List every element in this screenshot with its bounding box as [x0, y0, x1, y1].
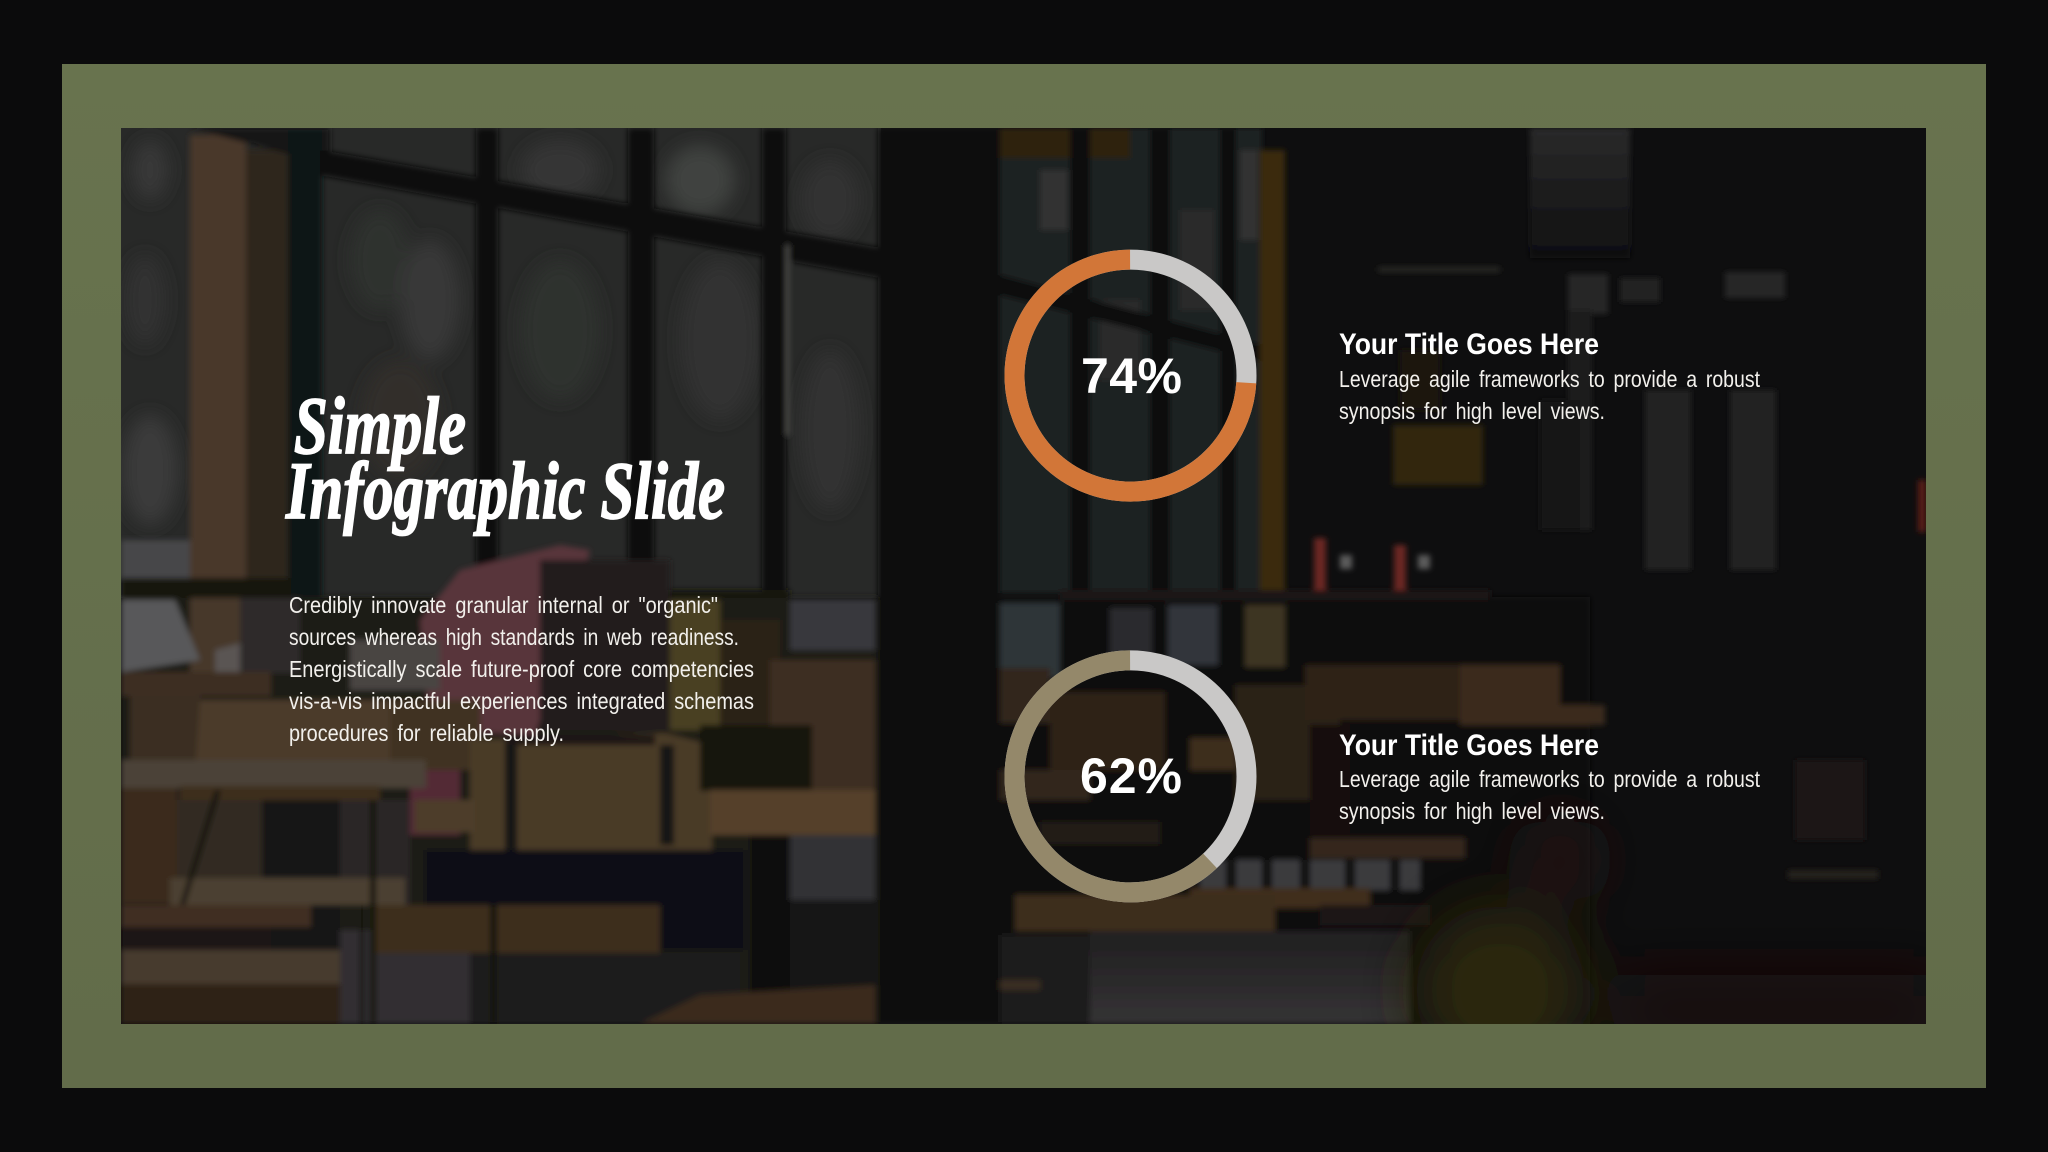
- hanging pull signs: [1568, 274, 1608, 314]
- blurred foreground objects: [1394, 817, 1926, 1024]
- title: Simple: [294, 380, 466, 471]
- value 74%: 74%: [1081, 348, 1182, 404]
- ring chart 62%: [1014, 660, 1246, 892]
- body paragraph: procedures for reliable supply.: [289, 720, 564, 746]
- body paragraph: [289, 592, 754, 746]
- description: synopsis for high level views.: [1339, 798, 1605, 824]
- description: [1339, 766, 1761, 824]
- panel: metric 62%: [1014, 660, 1761, 892]
- bottles: [1314, 538, 1326, 590]
- leg lines: [370, 800, 376, 1024]
- value 62%: 62%: [1080, 748, 1182, 804]
- title: [285, 380, 725, 536]
- panel: metric 74%: [1014, 260, 1761, 492]
- heading: Your Title Goes Here: [1339, 328, 1599, 361]
- description: [1339, 366, 1761, 424]
- chairs and tables: [196, 700, 390, 760]
- description: Leverage agile frameworks to provide a robust: [1339, 766, 1761, 792]
- heading: Your Title Goes Here: [1339, 729, 1599, 762]
- body paragraph: vis-a-vis impactful experiences integrated schemas: [289, 688, 754, 714]
- lower-left room: [121, 597, 881, 1024]
- panel: left column text: [285, 380, 754, 746]
- description: synopsis for high level views.: [1339, 398, 1605, 424]
- person: [420, 545, 590, 735]
- ring chart 74%: [1014, 260, 1246, 492]
- body paragraph: Energistically scale future-proof core competencies: [289, 656, 754, 682]
- body paragraph: Credibly innovate granular internal or "organic": [289, 592, 718, 618]
- title: Infographic Slide: [285, 445, 725, 536]
- right upper window: [1000, 128, 1262, 593]
- right lower room: [1000, 595, 1563, 929]
- background photo: cafe interior: [121, 128, 1940, 1075]
- dark column: [878, 128, 1000, 1024]
- upper-left window and pillar: [121, 537, 194, 582]
- description: Leverage agile frameworks to provide a robust: [1339, 366, 1761, 392]
- body paragraph: sources whereas high standards in web readiness.: [289, 624, 739, 650]
